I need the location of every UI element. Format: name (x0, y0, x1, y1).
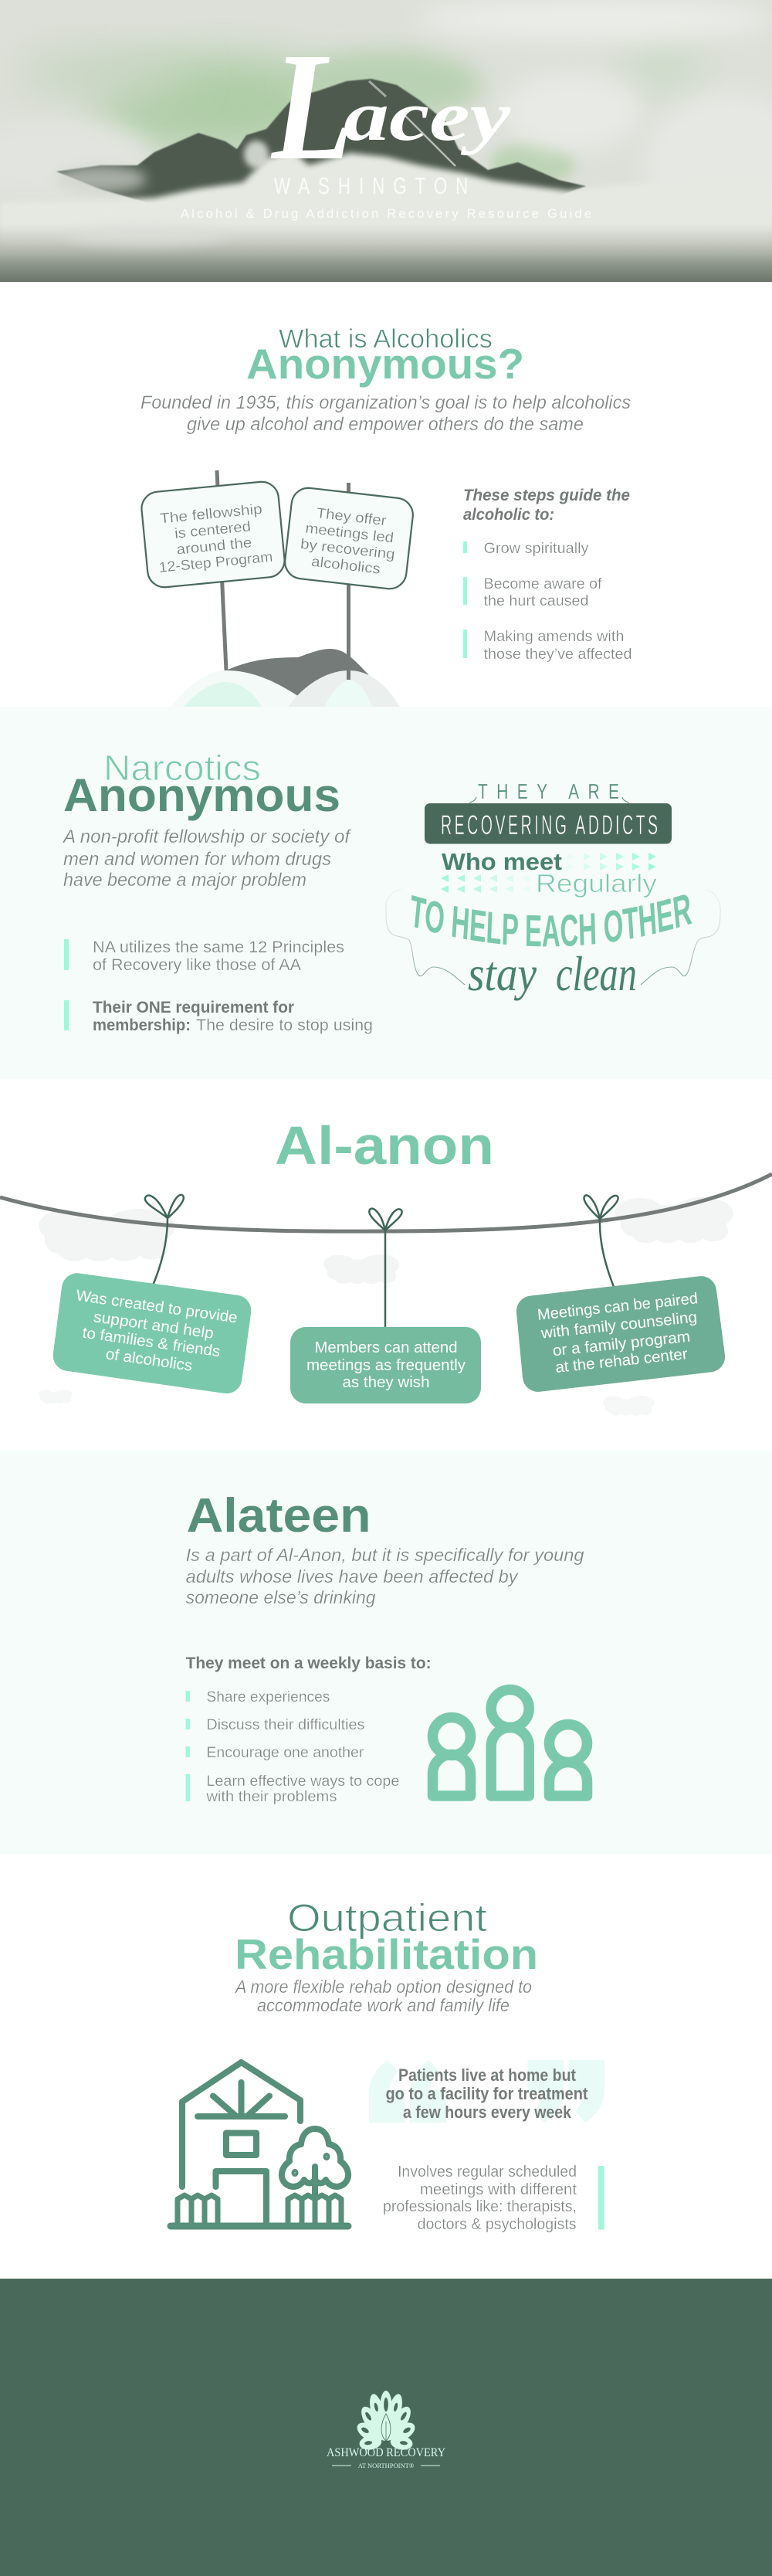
heading: What is Alcoholics Anonymous: What is Alcoholics (279, 324, 493, 354)
hanging tag: created to provide support: of alcoholics (105, 1346, 193, 1375)
heading: What is Alcoholics Anonymous: Anonymous? (246, 340, 524, 388)
typographic lockup: they are recovering addicts: THEY ARE (478, 780, 619, 804)
intro text: AA: give up alcohol and empower others do the same (187, 414, 584, 435)
heading: Narcotics Anonymous: Anonymous (63, 769, 340, 821)
typographic lockup: they are recovering addicts: stay (468, 946, 537, 1001)
list: weekly meetings (186, 1655, 432, 1805)
quote marks (369, 2060, 604, 2123)
sign: fellowship: The fellowship (159, 501, 263, 526)
section background: Alcoholics Anonymous (0, 282, 772, 707)
heading: Outpatient Rehabilitation: Rehabilitation (235, 1930, 538, 1978)
hanging tag: paired with family counseling: Meetings can be paired (537, 1290, 699, 1324)
logo: Ashwood Recovery (327, 2391, 445, 2469)
list: steps guide the alcoholic (463, 487, 631, 663)
icon: house and tree (171, 2062, 348, 2226)
note: 12 principles: NA utilizes the same 12 Principles (93, 938, 344, 956)
intro text: Alateen: Is a part of Al-Anon, but it is specifically for young (186, 1545, 584, 1565)
hanging tag: members can attend: meetings as frequently (306, 1357, 466, 1374)
heading: Narcotics Anonymous (63, 748, 340, 821)
logo: Ashwood Recovery: AT NORTHPOINT® (358, 2462, 415, 2469)
list: steps guide the alcoholic: Become aware of (483, 576, 602, 592)
sign: meetings: They offer (316, 504, 388, 528)
typographic lockup: they are recovering addicts: Regularly (536, 869, 658, 898)
logo: Ashwood Recovery: ASHWOOD RECOVERY (327, 2446, 445, 2459)
sign: fellowship (140, 480, 286, 589)
section background: Alateen (0, 1451, 772, 1854)
intro text: NA: A non-profit fellowship or society of (62, 826, 351, 847)
intro text: AA (141, 392, 631, 435)
sign: fellowship: 12-Step Program (158, 548, 273, 575)
intro text: NA: have become a major problem (63, 870, 306, 891)
note: scheduled meetings: meetings with different (420, 2181, 577, 2198)
callout: patients live at home (386, 2065, 588, 2122)
list: weekly meetings: with their problems (205, 1789, 337, 1805)
typographic lockup: they are recovering addicts: RECOVERING ADDICTS (441, 810, 658, 841)
title: Lacey letters: acey (344, 76, 511, 155)
note: 12 principles: of Recovery like those of AA (93, 956, 301, 974)
list: steps guide the alcoholic: those they’ve affected (483, 647, 631, 663)
heading: Narcotics Anonymous: Narcotics (103, 748, 261, 788)
list: weekly meetings: Share experiences (206, 1689, 330, 1705)
heading: Al-anon: Al-anon (275, 1115, 494, 1176)
hanging tag: created to provide support: Was created to provide (75, 1287, 239, 1327)
mountain (56, 79, 586, 202)
tagline: Alcohol & Drug Addiction Recovery Resource Guide (181, 207, 591, 221)
hanging tag: created to provide support: support and help (93, 1308, 215, 1342)
typographic lockup: they are recovering addicts: clean (556, 946, 637, 1001)
sign: meetings: by recovering (300, 535, 396, 562)
list: steps guide the alcoholic: Making amends with (483, 629, 624, 645)
sign: fellowship: around the (176, 534, 252, 558)
hanging tag: created to provide support: to families & friends (81, 1325, 222, 1360)
intro text: Alateen: adults whose lives have been affected by (186, 1566, 519, 1587)
sign: meetings (283, 486, 415, 591)
sign: meetings: alcoholics (310, 553, 381, 577)
hanging tag: members can attend: Members can attend (315, 1339, 457, 1356)
callout: patients live at home: a few hours every week (403, 2103, 572, 2122)
hanging tag: paired with family counseling: or a family program (552, 1329, 691, 1359)
callout: patients live at home: go to a facility for treatment (386, 2084, 588, 2103)
intro text: Outpatient: A more flexible rehab option designed to (234, 1977, 532, 1997)
section background: Narcotics Anonymous (0, 707, 772, 1079)
sign: meetings: meetings led (305, 520, 394, 545)
clothesline rope (0, 1174, 772, 1231)
note: scheduled meetings: Involves regular scheduled (398, 2164, 577, 2181)
intro text: NA (62, 826, 351, 891)
title: Lacey: L (270, 22, 354, 192)
icon: three people (432, 1690, 587, 1796)
note: scheduled meetings (383, 2164, 604, 2233)
typographic lockup: they are recovering addicts (386, 780, 721, 1001)
intro text: Alateen (186, 1545, 584, 1607)
list: weekly meetings: Discuss their difficulties (206, 1717, 364, 1733)
hanging tag: members can attend: as they wish (343, 1374, 429, 1391)
list: steps guide the alcoholic: Grow spiritually (483, 541, 589, 557)
note: scheduled meetings: doctors & psychologists (418, 2216, 577, 2233)
intro text: Outpatient: accommodate work and family life (257, 1995, 510, 2015)
hanging tag: paired with family counseling (532, 1195, 709, 1376)
subtitle: Washington: WASHINGTON (274, 172, 468, 199)
note: one requirement: The desire to stop using (196, 1016, 373, 1034)
intro text: NA: men and women for whom drugs (63, 849, 331, 870)
heading: Outpatient Rehabilitation: Outpatient (287, 1896, 487, 1940)
hanging tag: members can attend (290, 1209, 481, 1403)
list: steps guide the alcoholic: These steps guide the (463, 487, 630, 504)
fog (3, 148, 665, 229)
hanging tag: created to provide support (69, 1195, 239, 1378)
note: 12 principles (64, 938, 344, 974)
note: one requirement: membership: (93, 1016, 191, 1034)
list: steps guide the alcoholic: the hurt caused (483, 593, 588, 609)
section background: Al-anon (0, 1079, 772, 1451)
note: one requirement (64, 999, 373, 1034)
list: weekly meetings: They meet on a weekly basis to: (186, 1655, 432, 1672)
list: weekly meetings: Learn effective ways to cope (206, 1773, 399, 1790)
intro text: AA: Founded in 1935, this organization’s goal is to help alcoholics (141, 392, 631, 413)
hanging tag: paired with family counseling: with family counseling (540, 1308, 698, 1342)
intro text: Outpatient (234, 1977, 532, 2015)
list: weekly meetings: Encourage one another (206, 1745, 364, 1761)
list: steps guide the alcoholic: alcoholic to: (463, 506, 554, 524)
heading: Alateen: Alateen (187, 1489, 371, 1543)
typographic lockup: they are recovering addicts: TO HELP EACH OTHER (411, 894, 692, 947)
intro text: Alateen: someone else’s drinking (186, 1587, 376, 1607)
illustration: hills and sign posts (171, 470, 400, 707)
hanging tag: paired with family counseling: at the rehab center (554, 1346, 689, 1376)
typographic lockup: they are recovering addicts: Who meet (442, 848, 562, 875)
section background: Outpatient (0, 1854, 772, 2279)
clouds (39, 1197, 733, 1416)
note: scheduled meetings: professionals like: therapists, (383, 2198, 577, 2215)
heading: Outpatient Rehabilitation (235, 1896, 538, 1978)
header banner (0, 0, 772, 282)
callout: patients live at home: Patients live at home but (398, 2065, 577, 2085)
sign: fellowship: is centered (174, 518, 252, 541)
note: one requirement: Their ONE requirement for (93, 999, 294, 1016)
footer (0, 2279, 772, 2576)
